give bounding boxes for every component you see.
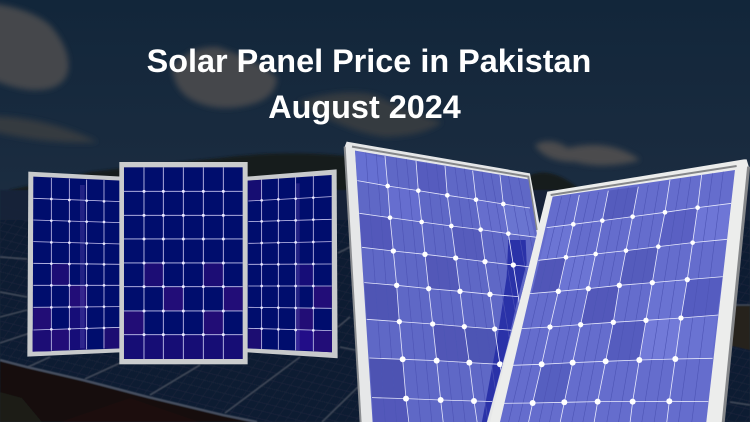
background: clouds [0,3,640,166]
title: August 2024 [268,89,461,125]
icon: large left solar panel [344,142,540,422]
icon: right small solar panel [247,169,338,358]
background: hills on horizon [10,153,578,240]
background: dark ground at bottom left [0,360,258,422]
icon: large right solar panel [489,159,749,422]
title [147,43,591,125]
background: solar array field [0,190,750,422]
icon: left small solar panel [27,172,122,357]
icon: centre small solar panel [119,162,248,364]
title: Solar Panel Price in Pakistan [147,43,591,79]
